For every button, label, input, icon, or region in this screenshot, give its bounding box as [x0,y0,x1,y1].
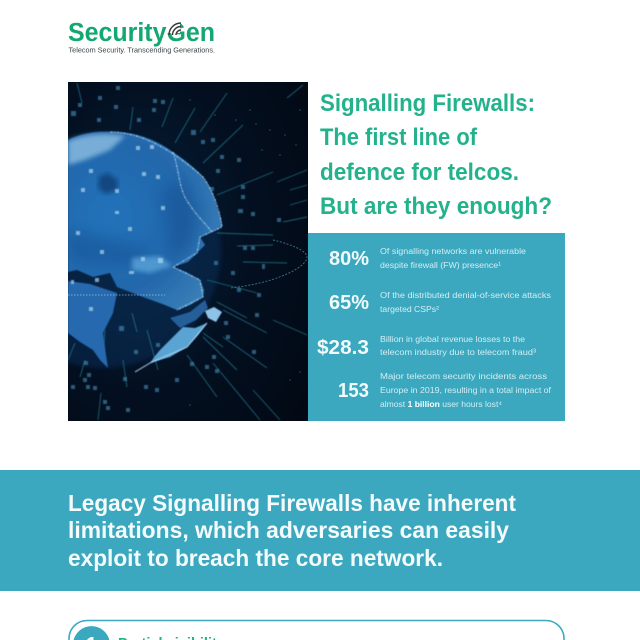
data dots [189,99,301,406]
heading: But are they enough? [320,193,552,220]
panel: statistics [308,233,565,421]
banner: legacy limitations: exploit to breach the core network. [68,545,443,571]
heading: Signalling Firewalls: [320,90,535,117]
equator dotted line [68,294,165,296]
stat: 153: 153 [338,379,369,402]
stat: 65%: Of the distributed denial-of-service attacks [380,290,552,300]
southeast asia [170,300,208,328]
light rays [68,83,307,420]
stat: 153: Europe in 2019, resulting in a total impact of [380,385,552,395]
stat: 80%: 80% [329,247,369,270]
stat: 65% [329,290,552,314]
stat: 80%: despite firewall (FW) presence¹ [380,260,501,270]
banner: legacy limitations: limitations, which adversaries can easily [68,517,509,543]
main landmass [68,132,222,310]
heading [320,90,552,220]
stat: 80%: Of signalling networks are vulnerable [380,246,526,256]
badge: number 1 [74,626,109,640]
stat: 153 [338,371,552,409]
coast outlines [110,132,222,372]
stat: 153: almost 1 billion user hours lost⁴ [380,399,502,409]
australia [150,323,207,363]
icons on globe [71,145,165,311]
stat: $28.3: Billion in global revenue losses to the [380,334,525,344]
logo tagline: Telecom Security. Transcending Generations. [68,46,215,54]
stat: 65%: 65% [329,291,369,314]
ring around globe [230,240,307,288]
logo wordmark: SecurityGen [68,19,215,47]
stat: 153: Major telecom security incidents across [380,371,548,381]
icon: logo signal arcs [167,21,181,35]
banner: legacy limitations: Legacy Signalling Firewalls have inherent [68,490,516,516]
south america [68,281,117,368]
heading: The first line of [320,124,478,151]
stat: $28.3 [317,334,536,359]
dark inland seas [98,173,118,194]
heading: defence for telcos. [320,159,519,186]
faint globe body [68,132,222,369]
card: partial visibility [69,620,564,640]
bright land highlights [68,134,125,165]
image: digital globe [68,82,308,421]
stat: 80% [329,246,526,270]
banner: legacy limitations [0,470,640,591]
stat: $28.3: telecom industry due to telecom fraud³ [380,347,536,357]
island [205,307,222,322]
stat: 65%: targeted CSPs² [380,304,439,314]
logo: SecurityGen [68,19,215,54]
continents [68,132,222,368]
stat: $28.3: $28.3 [317,336,369,359]
floating icons [71,86,281,412]
